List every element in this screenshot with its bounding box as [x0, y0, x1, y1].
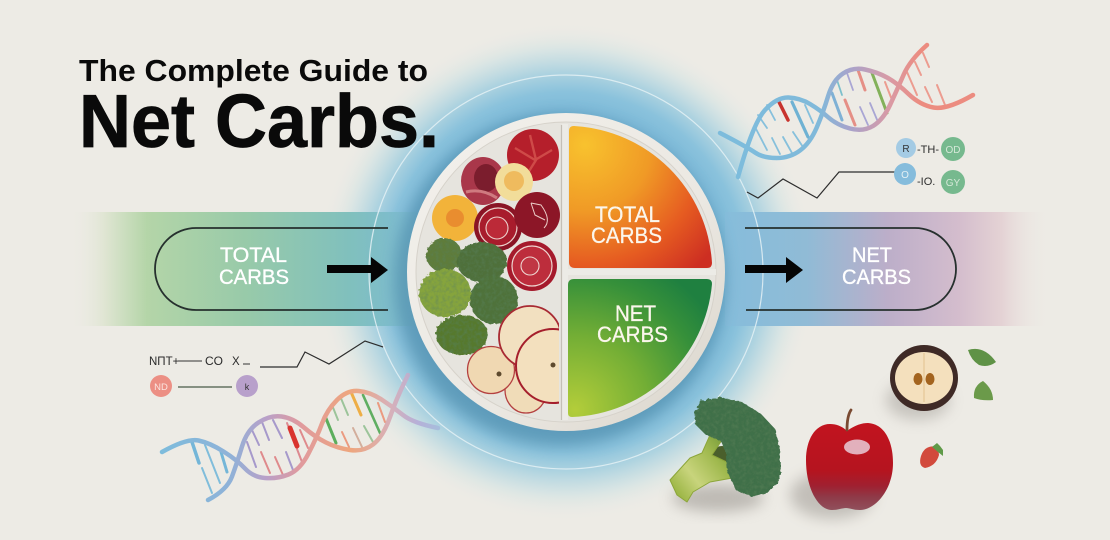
rungs — [755, 53, 945, 154]
section: net carbs — [568, 279, 712, 417]
apple seed — [550, 362, 556, 368]
broccoli shadow — [672, 484, 764, 512]
label total carbs: TOTAL — [220, 244, 287, 267]
plate — [407, 113, 725, 431]
title line 1: The Complete Guide to — [79, 53, 428, 88]
node blue label 2: O — [901, 170, 909, 181]
seed left — [914, 373, 922, 385]
red ring slice lower — [507, 241, 557, 291]
label io: -IO. — [917, 176, 935, 188]
title line 2: Net Carbs. — [79, 79, 439, 163]
formula text: X — [232, 356, 240, 368]
food: broccoli — [419, 238, 518, 355]
apple stem — [847, 410, 851, 430]
plate divider — [565, 124, 716, 420]
node purple label: k — [245, 382, 250, 392]
arrow out of plate — [745, 257, 803, 283]
formula text: NПT+ — [149, 356, 180, 368]
leaf top — [968, 349, 996, 366]
node salmon — [150, 375, 172, 397]
half shadow — [886, 380, 950, 420]
formula text: CO — [205, 354, 223, 368]
node green label 2: GY — [946, 178, 961, 189]
dna helix bottom left — [162, 375, 438, 500]
orange quarter — [569, 126, 712, 268]
apple half — [886, 345, 958, 420]
floret 3 — [419, 269, 471, 317]
node blue 1 — [896, 138, 916, 158]
label net carbs on plate: CARBS — [597, 322, 668, 347]
zigzag line — [747, 172, 895, 198]
section: total carbs — [569, 126, 712, 268]
node salmon label: ND — [154, 382, 168, 393]
floret 2 — [457, 242, 507, 282]
small strawberry — [920, 443, 943, 468]
node purple — [236, 375, 258, 397]
zigzag line — [260, 341, 383, 367]
orange slice — [432, 195, 478, 241]
panel: total carbs pill — [155, 228, 388, 310]
broccoli stem — [670, 435, 738, 502]
apple slice small — [468, 346, 514, 394]
apple highlight — [844, 440, 870, 454]
panel: net carbs pill — [745, 228, 956, 310]
bond line — [178, 386, 232, 388]
broccoli stem gap shade — [710, 446, 734, 470]
rungs — [192, 392, 385, 493]
label total carbs on plate: CARBS — [591, 223, 662, 248]
apple body — [806, 423, 893, 510]
dark red slice — [514, 192, 560, 238]
label total carbs on plate: TOTAL — [595, 202, 660, 227]
floret 4 — [470, 276, 518, 324]
label total carbs: CARBS — [219, 266, 289, 289]
formula connectors — [178, 361, 250, 364]
green quarter — [568, 279, 712, 417]
plate shadow — [394, 114, 726, 446]
core line — [923, 353, 925, 402]
dark pink slice — [461, 157, 505, 205]
whole apple — [790, 410, 893, 519]
molecule diagram top right — [747, 137, 965, 198]
food: sliced fruit — [432, 129, 560, 291]
label net carbs on plate — [597, 301, 668, 347]
title — [79, 53, 439, 163]
apple skin — [890, 345, 958, 411]
apple slice back — [499, 306, 561, 368]
yellow slice — [495, 163, 533, 201]
broccoli head — [696, 399, 779, 495]
seed right — [926, 373, 934, 385]
label net carbs on plate: NET — [615, 301, 656, 326]
label total carbs — [219, 244, 289, 289]
node green 2 — [941, 170, 965, 194]
floret 1 — [426, 238, 462, 272]
plate well — [416, 122, 716, 422]
red fruit slice — [507, 129, 559, 181]
thin halo ring — [369, 75, 763, 469]
node blue 2 — [894, 163, 916, 185]
blue glow behind plate — [316, 22, 816, 522]
apple slice lower — [505, 367, 547, 413]
label total carbs on plate — [591, 202, 662, 248]
pill outline right — [745, 228, 956, 310]
apple shadow — [790, 471, 874, 519]
divider shade — [560, 125, 562, 420]
label th: -TH- — [917, 144, 939, 156]
food: apple slices — [466, 305, 559, 414]
apple seed small — [496, 372, 502, 376]
red ring slice — [474, 203, 522, 251]
pill outline left — [155, 228, 388, 310]
molecule diagram bottom left — [149, 341, 383, 397]
left gradient band — [70, 212, 420, 326]
label net carbs: CARBS — [842, 266, 911, 289]
strand b — [208, 375, 408, 500]
infographic canvas — [79, 40, 1022, 524]
label net carbs: NET — [852, 244, 892, 267]
leaf lower — [974, 381, 993, 400]
whole broccoli — [670, 399, 779, 512]
floret 5 — [436, 315, 488, 355]
label net carbs — [842, 244, 911, 289]
strawberry body — [920, 446, 939, 468]
node label 1: R — [902, 144, 910, 155]
strand a — [162, 391, 438, 478]
strand b — [720, 69, 973, 158]
arrow into plate — [327, 257, 388, 283]
apple flesh — [895, 352, 953, 404]
apple slice front — [515, 328, 559, 404]
node green label 1: OD — [946, 145, 960, 156]
node green 1 — [941, 137, 965, 161]
right gradient band — [725, 212, 1050, 326]
dna helix top right — [720, 45, 973, 177]
strand a — [738, 45, 927, 177]
plate rim — [407, 113, 725, 431]
strawberry leaves — [932, 443, 943, 456]
